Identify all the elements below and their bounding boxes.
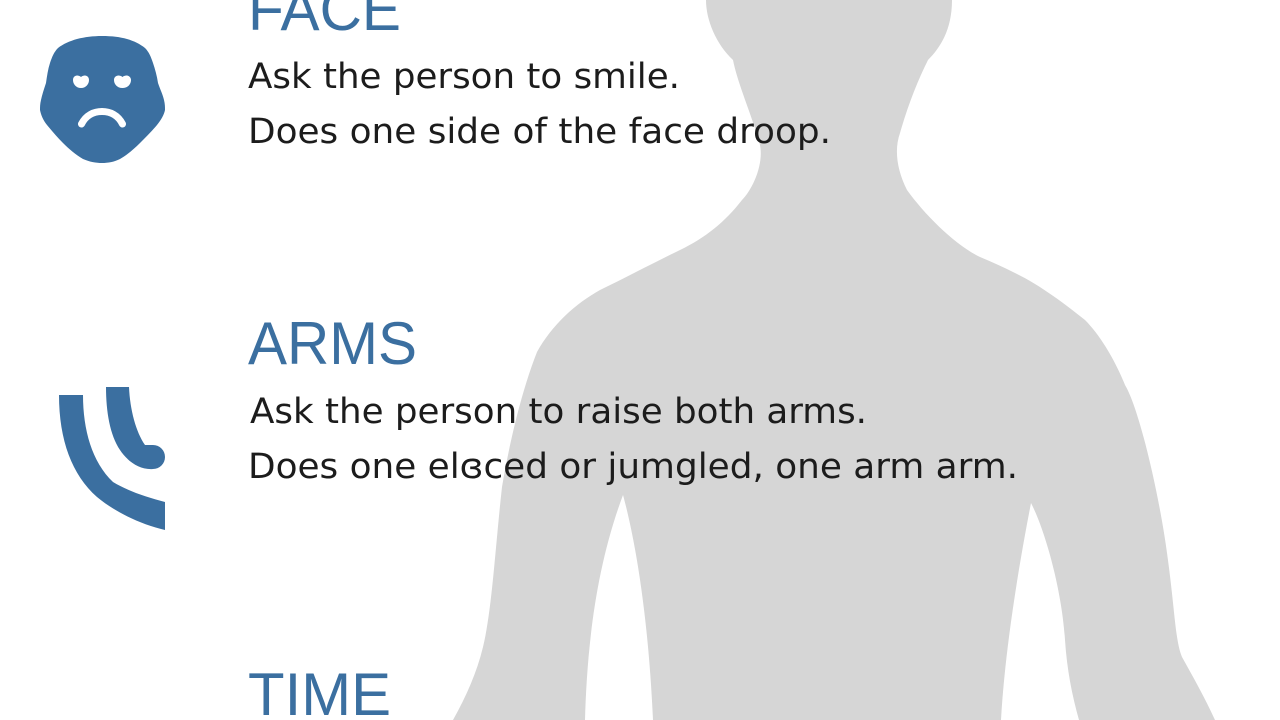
icon: drooping face (40, 36, 165, 163)
text: arms instruction line 2: Does one elɞced or jumgled, one arm arm. (248, 447, 1018, 487)
text: face instruction line 1: Ask the person to smile. (248, 57, 680, 97)
text: arms instruction line 1: Ask the person to raise both arms. (250, 392, 867, 432)
icon: arms (59, 387, 165, 530)
heading: ARMS: ARMS (248, 310, 417, 377)
body silhouette (453, 0, 1215, 720)
text: face instruction line 2: Does one side of the face droop. (248, 112, 831, 152)
